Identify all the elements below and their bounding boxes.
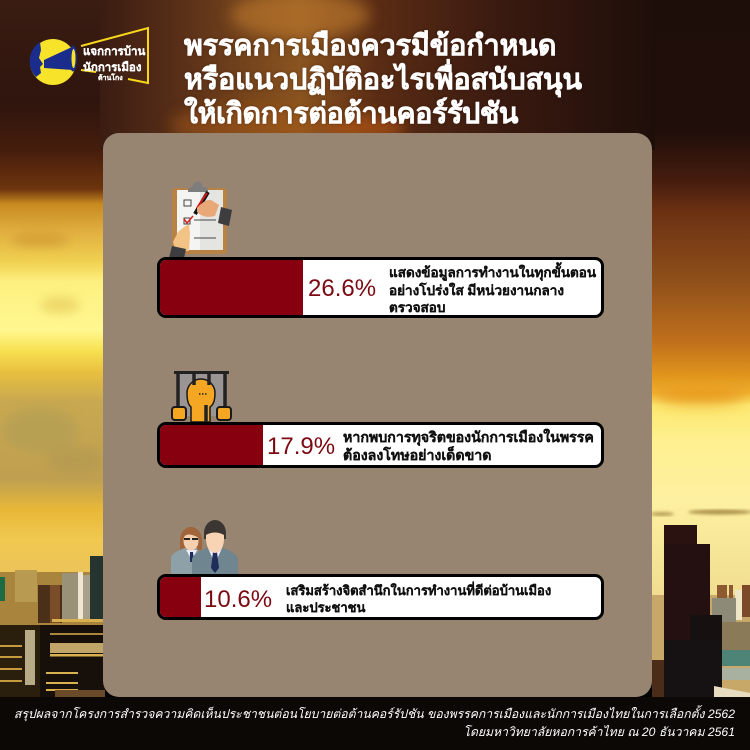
- bar label: อย่างโปร่งใส มีหน่วยงานกลาง: [389, 282, 564, 298]
- right skyline: [652, 525, 750, 697]
- bar fill: [160, 577, 201, 617]
- bar label: เสริมสร้างจิตสำนึกในการทำงานที่ดีต่อบ้านเมือง: [286, 582, 551, 598]
- icon: man and woman in suits: [171, 520, 238, 574]
- icon: person behind bars: [171, 371, 232, 422]
- logo text: นักการเมือง: [83, 61, 142, 74]
- footer band: [0, 697, 750, 750]
- bar label: ต้องลงโทษอย่างเด็ดขาด: [343, 448, 492, 464]
- logo text: [83, 45, 145, 82]
- bar fill: [160, 260, 303, 315]
- bar label: หากพบการทุจริตของนักการเมืองในพรรค: [343, 430, 594, 446]
- bar fill: [160, 425, 263, 465]
- logo frame: [81, 28, 148, 83]
- footer source text: [14, 705, 735, 739]
- title: [184, 28, 582, 130]
- bar label: [343, 428, 594, 464]
- title: หรือแนวปฏิบัติอะไรเพื่อสนับสนุน: [184, 64, 582, 96]
- icon: clipboard checklist: [169, 182, 232, 257]
- percentage: 17.9%: [267, 433, 335, 460]
- footer source text: สรุปผลจากโครงการสำรวจความคิดเห็นประชาชนต่อนโยบายต่อต้านคอร์รัปชัน ของพรรคการเมืองและนักการเมืองไทยในการเลือกตั้ง 2562: [14, 707, 735, 721]
- bar 1: 26.6%: [157, 257, 604, 318]
- bar label: ตรวจสอบ: [389, 300, 445, 315]
- bar label: [389, 262, 596, 315]
- title: ให้เกิดการต่อต้านคอร์รัปชัน: [184, 98, 518, 130]
- percentage: 10.6%: [204, 586, 272, 613]
- bar label: [286, 581, 551, 614]
- bar 3: 10.6%: [157, 574, 604, 620]
- logo emblem: face and megaphone: [30, 39, 77, 85]
- bar label: และประชาชน: [286, 600, 365, 614]
- percentage: 26.6%: [308, 275, 376, 302]
- left skyline: [0, 556, 105, 697]
- title: พรรคการเมืองควรมีข้อกำหนด: [184, 30, 556, 62]
- footer source text: โดยมหาวิทยาลัยหอการค้าไทย ณ 20 ธันวาคม 2561: [463, 725, 735, 739]
- main panel: [103, 133, 652, 697]
- bar label: แสดงข้อมูลการทำงานในทุกขั้นตอน: [389, 265, 596, 280]
- logo text: แจกการบ้าน: [83, 45, 145, 58]
- logo: [30, 26, 149, 85]
- logo text: ต้านโกง: [98, 73, 123, 82]
- bar 2: 17.9%: [157, 422, 604, 468]
